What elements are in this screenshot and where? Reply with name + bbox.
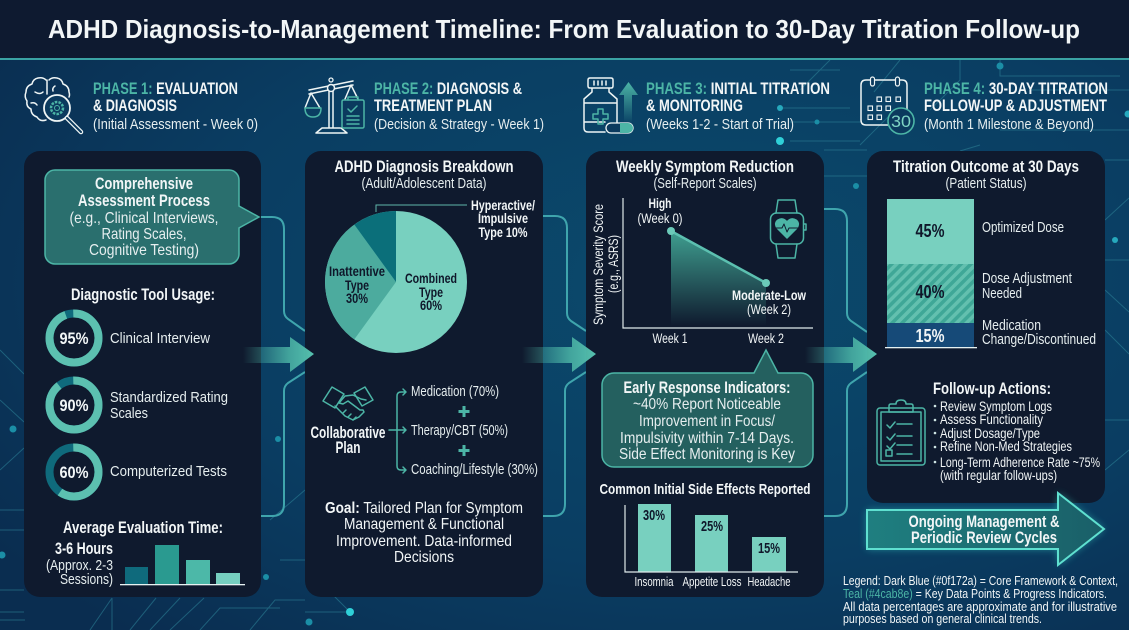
callout: comprehensive assessment process: Rating Scales,: [102, 226, 186, 243]
pie chart: ADHD types: Type 10%: [478, 224, 528, 240]
stacked bar: outcomes: 15%: [916, 326, 944, 346]
line chart: symptom severity: [590, 195, 813, 346]
pie chart: ADHD types: Type: [345, 277, 369, 293]
title band: ADHD Diagnosis-to-Management Timeline: From Evaluation to 30-Day Titration Follow-up: [48, 14, 1080, 44]
line chart: symptom severity: (Week 0): [638, 210, 682, 226]
heading: titration outcome: [893, 158, 1079, 192]
big arrow: ongoing management: Periodic Review Cycles: [911, 528, 1057, 547]
stacked bar: outcomes: Dose Adjustment: [982, 270, 1073, 287]
connector lines: [261, 209, 867, 516]
icon: brain and magnifier: [25, 78, 81, 132]
list: follow-up actions: Review Symptom Logs: [940, 398, 1052, 414]
panel: phase 1: [24, 151, 261, 597]
text: goal: [325, 500, 523, 566]
heading: average evaluation time: Average Evaluation Time:: [63, 519, 223, 537]
list: follow-up actions: Adjust Dosage/Type: [940, 425, 1040, 441]
stacked bar: outcomes: Needed: [982, 285, 1022, 302]
bar chart: side effects: 15%: [758, 540, 780, 557]
text: 3-6 hours: 3-6 Hours: [55, 540, 113, 558]
bar chart: side effects: [625, 504, 798, 589]
phase 4 header: [861, 77, 1108, 134]
pie chart: ADHD types: Inattentive: [329, 263, 385, 279]
callout: comprehensive assessment process: [45, 170, 259, 264]
title band: [0, 0, 1129, 60]
list: follow-up actions: Refine Non-Med Strategies: [940, 438, 1072, 454]
list: plan components: Therapy/CBT (50%): [411, 422, 508, 439]
heading: weekly symptom reduction: [616, 158, 794, 192]
stacked bar: outcomes: [885, 199, 1096, 348]
text: 3-6 hours: [46, 540, 113, 588]
heading: phase 1: (Initial Assessment - Week 0): [93, 116, 258, 133]
stacked bar: outcomes: 40%: [916, 282, 944, 302]
bar chart: side effects: Insomnia: [634, 574, 674, 589]
panel: phase 4: [867, 151, 1105, 503]
heading: phase 2: PHASE 2: DIAGNOSIS &: [374, 79, 522, 98]
list: follow-up actions: (with regular follow-ups): [940, 467, 1057, 483]
line chart: symptom severity: Week 2: [748, 330, 784, 346]
text: 3-6 hours: Sessions): [60, 571, 113, 588]
text: 3-6 hours: (Approx. 2-3: [46, 557, 113, 574]
big arrow: ongoing management: [867, 493, 1104, 565]
heading: phase 4: [924, 79, 1108, 133]
icon: handshake: [323, 387, 373, 420]
text: goal: Goal: Tailored Plan for Symptom: [325, 500, 523, 517]
callout: early response indicators: [602, 350, 813, 467]
donut: standardized rating scales 90%: Scales: [110, 405, 148, 422]
donut: clinical interview 95%: [50, 314, 210, 362]
stacked bar: outcomes: Medication: [982, 317, 1041, 334]
callout: early response indicators: Improvement in Focus/: [639, 413, 775, 430]
callout: early response indicators: Side Effect Monitoring is Key: [619, 446, 795, 463]
donut: computerized tests 60%: 60%: [60, 463, 88, 482]
heading: diagnostic tool usage: Diagnostic Tool Usage:: [71, 286, 215, 304]
bar chart: side effects: 30%: [643, 507, 665, 524]
heading: diagnosis breakdown: [334, 158, 514, 192]
bar chart: side effects: Appetite Loss: [682, 574, 742, 589]
donut: standardized rating scales 90%: 90%: [60, 396, 88, 415]
heading: phase 3: PHASE 3: INITIAL TITRATION: [646, 79, 830, 98]
donut: clinical interview 95%: Clinical Interview: [110, 330, 210, 347]
text: collaborative plan: Collaborative: [310, 424, 386, 442]
heading: weekly symptom reduction: Weekly Symptom Reduction: [616, 158, 794, 176]
pie chart: ADHD types: 30%: [346, 290, 368, 306]
line chart: symptom severity: Symptom Severity Score: [590, 204, 606, 325]
stacked bar: outcomes: Change/Discontinued: [982, 331, 1096, 348]
callout: comprehensive assessment process: (e.g., Clinical Interviews,: [70, 210, 218, 227]
heading: phase 4: (Month 1 Milestone & Beyond): [924, 116, 1094, 133]
heading: side effects: Common Initial Side Effects Reported: [600, 481, 810, 498]
list: plan components: Coaching/Lifestyle (30%): [411, 461, 538, 478]
legend: [843, 573, 1118, 626]
pie chart: ADHD types: [325, 197, 535, 353]
list: plan components: Medication (70%): [411, 383, 499, 400]
arrows: plan branches: [389, 389, 406, 473]
icon: clipboard checklist: [877, 400, 925, 465]
donut: standardized rating scales 90%: [50, 380, 228, 430]
donut: clinical interview 95%: 95%: [60, 329, 88, 348]
heading: titration outcome: (Patient Status): [946, 175, 1026, 192]
donut: computerized tests 60%: [50, 448, 227, 496]
heading: diagnosis breakdown: ADHD Diagnosis Breakdown: [334, 158, 514, 176]
line chart: symptom severity: Week 1: [652, 330, 688, 346]
donut: standardized rating scales 90%: Standardized Rating: [110, 389, 228, 406]
line chart: symptom severity: (e.g., ASRS): [605, 235, 621, 293]
bar chart: side effects: 25%: [701, 518, 723, 535]
phase 2 header: [305, 78, 544, 133]
heading: phase 2: (Decision & Strategy - Week 1): [374, 116, 544, 133]
pie chart: ADHD types: Combined: [405, 270, 457, 286]
icon: calendar 30: [861, 77, 914, 134]
text: goal: Improvement. Data-informed: [336, 533, 512, 550]
callout: early response indicators: ~40% Report Noticeable: [633, 396, 781, 413]
stacked bar: outcomes: 45%: [916, 221, 944, 241]
heading: phase 2: [374, 79, 544, 133]
bar chart: side effects: Headache: [748, 574, 790, 589]
callout: comprehensive assessment process: Assessment Process: [78, 192, 210, 210]
panel: phase 3: [586, 151, 824, 597]
phase 1 header: [25, 78, 258, 133]
list: follow-up actions: [933, 379, 1100, 483]
icon: calendar 30: 30: [891, 112, 911, 131]
heading: diagnosis breakdown: (Adult/Adolescent Data): [362, 175, 486, 192]
pie chart: ADHD types: 60%: [420, 297, 442, 313]
icon: scales and clipboard: [305, 78, 364, 133]
list: follow-up actions: Assess Functionality: [940, 411, 1043, 427]
callout: early response indicators: Impulsivity within 7-14 Days.: [620, 430, 794, 447]
icon: smartwatch: [770, 200, 806, 258]
heading: phase 3: [646, 79, 830, 133]
text: goal: Management & Functional: [344, 516, 504, 533]
panel: phase 2: [305, 151, 543, 597]
pie chart: ADHD types: Impulsive: [478, 210, 528, 226]
arrow: phase 3 to 4: [805, 337, 877, 372]
callout: comprehensive assessment process: Cognitive Testing): [89, 242, 199, 259]
heading: phase 3: & MONITORING: [646, 96, 743, 115]
heading: titration outcome: Titration Outcome at 30 Days: [893, 158, 1079, 176]
text: collaborative plan: [310, 424, 386, 457]
arrow: phase 2 to 3: [522, 337, 596, 372]
list: follow-up actions: Follow-up Actions:: [933, 379, 1051, 398]
heading: phase 3: (Weeks 1-2 - Start of Trial): [646, 116, 794, 133]
line chart: symptom severity: (Week 2): [747, 301, 791, 317]
text: collaborative plan: Plan: [336, 439, 360, 457]
text: goal: Decisions: [394, 549, 454, 566]
callout: early response indicators: Early Response Indicators:: [624, 379, 790, 397]
list: plan components: [411, 383, 538, 478]
line chart: symptom severity: High: [648, 195, 672, 211]
heading: phase 2: TREATMENT PLAN: [374, 96, 492, 115]
heading: phase 1: PHASE 1: EVALUATION: [93, 79, 238, 98]
callout: comprehensive assessment process: Comprehensive: [95, 175, 193, 193]
stacked bar: outcomes: Optimized Dose: [982, 219, 1064, 236]
big arrow: ongoing management: Ongoing Management &: [908, 512, 1060, 531]
icon: medication bottle: [584, 78, 638, 133]
arrow: phase 1 to 2: [243, 337, 314, 372]
donut: computerized tests 60%: Computerized Tests: [110, 463, 227, 480]
bar chart: evaluation time: [120, 545, 245, 585]
heading: weekly symptom reduction: (Self-Report Scales): [654, 175, 757, 192]
pie chart: ADHD types: Type: [419, 284, 443, 300]
heading: phase 1: [93, 79, 258, 133]
heading: phase 1: & DIAGNOSIS: [93, 96, 177, 115]
line chart: symptom severity: Moderate-Low: [732, 287, 806, 303]
phase 3 header: [584, 78, 830, 133]
pie chart: ADHD types: Hyperactive/: [471, 197, 535, 213]
legend: purposes based on general clinical trends.: [843, 611, 1042, 626]
